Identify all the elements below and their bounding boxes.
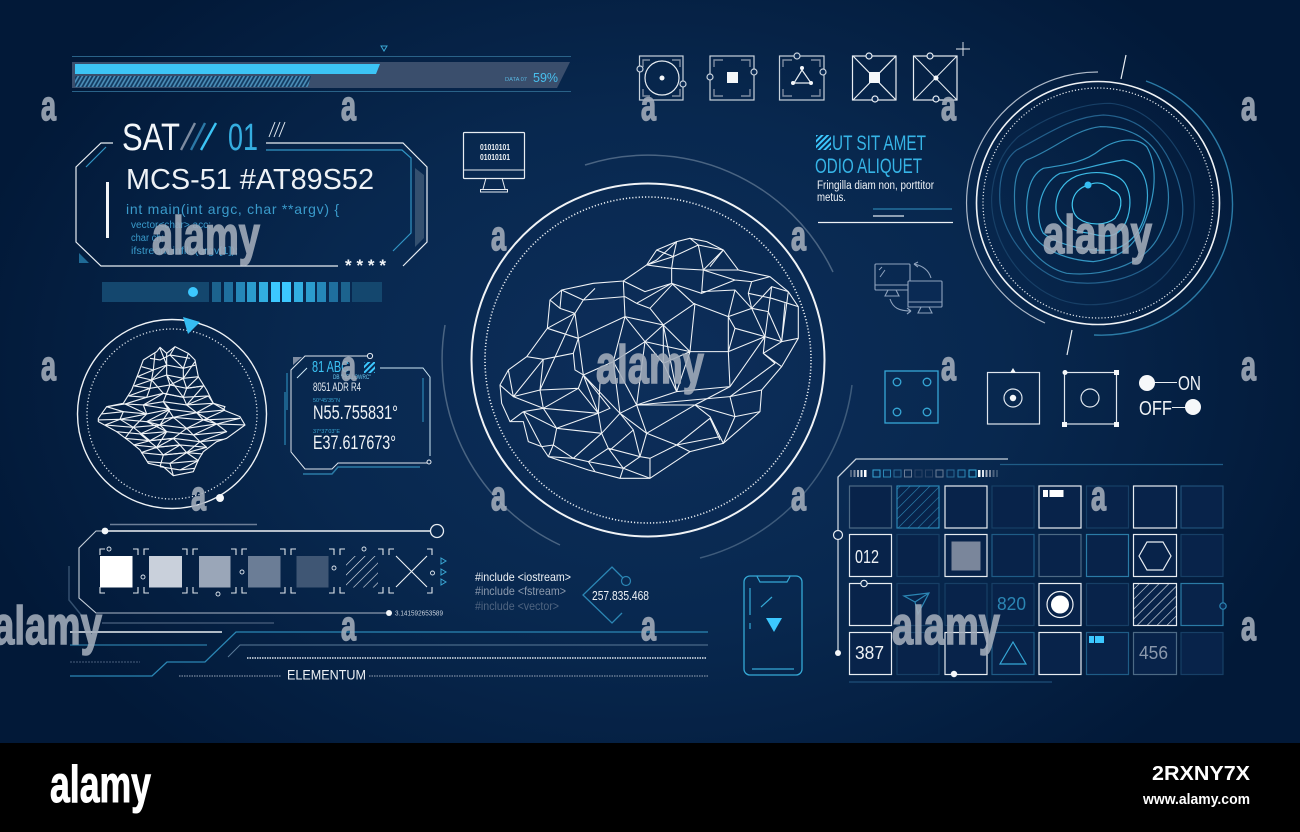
watermarks: a [491,472,506,519]
top progress bar [72,46,571,92]
grid indicator strip [850,470,998,477]
panel: 81 ABC coordinates [285,353,431,474]
include code text: #include <vector> [475,599,559,613]
panel: SAT 01 code screen [76,117,427,275]
panel: SAT 01 code screen: MCS-51 #AT89S52 [126,164,374,196]
wireframe mountain [98,347,245,476]
heading block: ODIO ALIQUET [815,155,922,178]
watermarks: a [191,472,206,519]
top progress bar: 59% [533,70,558,85]
panel: colour swatches [69,524,446,618]
panel: 81 ABC coordinates: N55.755831° [313,403,398,424]
watermarks: a [41,342,56,389]
panel: 81 ABC coordinates: 81 ABC [312,359,349,376]
watermarks: a [791,472,806,519]
panel: SAT 01 code screen: **** [345,256,386,275]
icon: monitor with binary [464,132,524,192]
panel: 81 ABC coordinates: 37°37'03"E [313,429,340,435]
watermarks: a [341,82,356,129]
watermarks: alamy [596,335,704,395]
icon row: targets [637,42,970,102]
wireframe asteroid [500,238,798,478]
grid cells row 3 [850,580,1226,626]
include code text: #include <iostream> [475,570,571,584]
icon: target square [988,368,1040,424]
watermarks: a [1241,82,1256,129]
panel: SAT 01 code screen: char ch; [131,233,164,244]
watermarks: a [1091,472,1106,519]
icon: circle target [637,56,686,100]
diamond readout: 257.835.468 [592,589,649,603]
circuit lines and ELEMENTUM label [70,623,708,682]
panel: 81 ABC coordinates: 50°45'35"N [313,398,340,404]
footer bar [0,743,1300,832]
watermarks: a [41,82,56,129]
grid cells row 4 [850,632,1223,677]
panel: 81 ABC coordinates: E37.617673° [313,433,396,454]
icon: triangle target [780,53,826,100]
icon: node square [1062,370,1119,427]
include code text: #include <fstream> [475,584,566,598]
heading block: UT SIT AMET [832,132,926,155]
watermarks: a [641,602,656,649]
grid cells row 4: 456 [1139,643,1168,663]
icon: blue square with four circles [885,371,938,423]
grid cells row 3: 820 [997,594,1026,614]
watermarks: a [641,82,656,129]
toggle switches [1139,373,1201,420]
heading block [815,132,953,222]
watermarks: a [941,82,956,129]
grid cells row 4: 387 [855,643,884,663]
panel: 81 ABC coordinates: DB "HELLOWRC" [333,375,371,381]
toggle switches: ON [1178,373,1201,395]
watermarks: a [491,212,506,259]
panel: SAT 01 code screen: 01 [228,117,258,159]
toggle switches: OFF [1139,398,1172,420]
diamond readout [583,567,649,623]
icon: crossed dot [914,42,970,102]
icon: monitor with binary: 01010101 [480,153,510,162]
icon: square target [707,56,757,100]
contour lines [992,103,1194,305]
icon: monitor with binary: 01010101 [480,143,510,152]
panel: SAT 01 code screen: SAT [122,117,180,159]
icon: phone [744,576,802,675]
circuit lines and ELEMENTUM label: ELEMENTUM [287,666,366,682]
contour map radar [967,55,1233,355]
watermarks: a [1241,602,1256,649]
watermarks: a [341,342,356,389]
icon: crossed square [852,53,896,102]
swatch brackets [100,549,432,593]
watermarks: a [341,602,356,649]
footer bar: alamy [50,756,151,814]
watermarks: a [941,342,956,389]
watermarks: alamy [152,206,260,266]
top progress bar: DATA 07 [505,77,527,83]
footer bar: www.alamy.com [1142,791,1250,808]
radar with wireframe mountain [78,317,266,508]
watermarks: alamy [1043,205,1152,265]
panel: SAT 01 code screen: int main(int argc, char **argv) { [126,201,339,217]
grid cells row 1 [850,486,1223,528]
footer bar: 2RXNY7X [1152,763,1251,785]
central circle with wireframe asteroid [442,155,852,558]
grid cells row 2 [850,534,1223,576]
panel: SAT 01 code screen: vector<char> acc; [131,220,211,231]
segmented slider [102,282,382,302]
watermarks: alamy [892,596,1000,656]
watermarks [0,82,1256,656]
panel: control grid [834,459,1226,682]
include code text [475,570,571,613]
grid cells row 2: 012 [855,547,879,567]
icon: networked monitors [875,262,942,314]
panel: 81 ABC coordinates: 8051 ADR R4 [313,382,361,394]
watermarks: a [1241,342,1256,389]
panel: SAT 01 code screen: ifstream infile(argv[1]); [131,246,238,257]
watermarks: a [791,212,806,259]
panel: colour swatches: 3.141592653589 [395,610,443,618]
heading block: Fringilla diam non, porttitor [817,180,934,192]
heading block: metus. [817,192,846,204]
